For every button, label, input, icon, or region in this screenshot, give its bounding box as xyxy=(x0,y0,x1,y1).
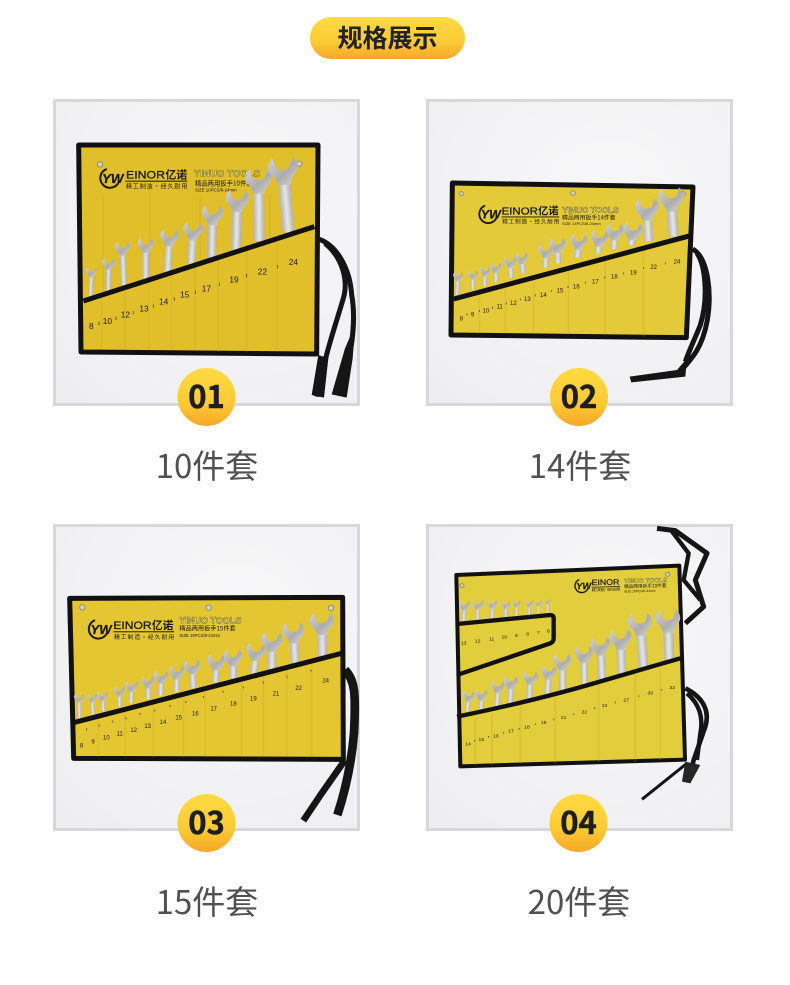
size numbers: top pocket xyxy=(461,628,550,646)
size numbers: top pocket: 13 xyxy=(461,640,467,646)
logo: EINOR brand block xyxy=(479,202,619,226)
size numbers: bottom pocket: 30 xyxy=(648,691,653,697)
size numbers: bottom pocket: 18 xyxy=(524,725,530,731)
logo: EINOR brand block: 亿诺 xyxy=(165,166,187,182)
bag: yellow roll xyxy=(456,566,685,766)
logo: EINOR brand block: 精品两用扳手14件套 xyxy=(562,213,616,222)
straps: panel 1 xyxy=(312,239,355,398)
size numbers: bottom pocket: 21 xyxy=(561,715,567,721)
logo: EINOR brand block: 精品两用扳手10件套 xyxy=(195,178,253,187)
size numbers: 24 xyxy=(674,260,681,266)
straps: panel 2 xyxy=(630,249,709,382)
straps: panel 4 xyxy=(642,528,707,799)
logo: EINOR brand block: YW xyxy=(90,622,113,637)
wrenches: 10 pieces xyxy=(85,156,303,297)
logo: EINOR brand block: SIZE 14PCS/8-24mm xyxy=(562,221,601,226)
wrenches: bottom pocket, 12 pieces xyxy=(461,610,682,712)
logo: EINOR brand block: SIZE 15PCS/8-24mm xyxy=(179,633,221,638)
logo: EINOR brand block: 精工制造·经久耐用 xyxy=(502,218,559,226)
size numbers: 15 xyxy=(180,290,190,300)
wrenches: 15 pieces xyxy=(74,613,335,719)
size numbers: 8 xyxy=(460,316,464,322)
size numbers: top pocket: 9 xyxy=(515,633,518,639)
logo: EINOR brand block: YINUO TOOLS xyxy=(624,578,667,585)
size numbers: 13 xyxy=(139,304,149,314)
straps: panel 3 xyxy=(303,670,355,821)
size numbers: bottom pocket: 16 xyxy=(493,733,499,739)
size numbers xyxy=(89,257,298,331)
size numbers: bottom pocket: 17 xyxy=(508,729,514,735)
panel: 14-piece set xyxy=(428,100,732,404)
size numbers: 14 xyxy=(160,720,167,726)
size numbers: 24 xyxy=(289,257,298,267)
logo: EINOR brand block: YINUO TOOLS xyxy=(194,169,260,179)
logo: EINOR brand block: EINOR xyxy=(502,205,538,217)
caption: 10件套: 10件套 xyxy=(156,440,258,488)
logo: EINOR brand block: 亿诺 xyxy=(538,202,559,217)
size numbers: bottom pocket: 27 xyxy=(624,698,629,704)
badge 04 xyxy=(550,794,608,852)
badge 03 xyxy=(178,794,236,852)
badge 01 xyxy=(178,368,236,426)
logo: EINOR brand block xyxy=(100,166,260,192)
badge 03: 03 xyxy=(188,798,225,843)
size numbers: 9 xyxy=(91,739,95,745)
logo: EINOR brand block: 精品两用扳手15件套 xyxy=(179,624,236,633)
size numbers: top pocket: 12 xyxy=(475,638,481,644)
size numbers: 19 xyxy=(250,697,257,703)
size numbers: 9 xyxy=(471,312,475,318)
size numbers: 10 xyxy=(103,316,112,326)
pocket band xyxy=(73,653,342,723)
size numbers: 24 xyxy=(322,679,330,685)
badge 02: 02 xyxy=(561,372,597,417)
heading pill: 规格展示: 规格展示 xyxy=(337,19,438,55)
size numbers: 11 xyxy=(117,732,123,738)
size numbers: 19 xyxy=(229,275,239,285)
size numbers: top pocket: 7 xyxy=(537,630,540,636)
bag: yellow roll xyxy=(70,597,343,759)
size numbers: 12 xyxy=(121,310,130,320)
caption: 15件套: 15件套 xyxy=(156,876,258,924)
size numbers: 8 xyxy=(89,321,94,331)
size numbers: 16 xyxy=(573,284,580,290)
logo: EINOR brand block: 精品两用扳手20件套 xyxy=(624,582,667,590)
size numbers: 14 xyxy=(159,296,169,306)
size numbers: bottom pocket: 22 xyxy=(582,709,587,715)
size numbers: 19 xyxy=(630,270,637,276)
logo: EINOR brand block: YINUO TOOLS xyxy=(562,205,619,215)
heading pill: 规格展示 xyxy=(310,17,465,59)
size numbers xyxy=(460,260,681,322)
size numbers xyxy=(80,679,330,749)
logo: EINOR brand block: SIZE 20PCS/6-32mm xyxy=(624,589,656,594)
size numbers: 13 xyxy=(524,297,531,303)
size numbers: 8 xyxy=(80,743,84,749)
size numbers: 11 xyxy=(497,305,503,311)
bottom pocket band xyxy=(457,658,680,717)
size numbers: 16 xyxy=(192,711,199,717)
caption: 20件套: 20件套 xyxy=(528,876,630,924)
panel: 15-piece set xyxy=(54,526,358,830)
caption: 14件套: 14件套 xyxy=(529,440,631,488)
badge 04: 04 xyxy=(560,798,597,843)
badge 02 xyxy=(550,368,608,426)
pocket band xyxy=(454,236,690,299)
size numbers: 12 xyxy=(510,301,517,307)
size numbers: bottom pocket: 14 xyxy=(465,742,471,748)
logo: EINOR brand block: YW xyxy=(576,581,593,591)
logo: EINOR brand block: SIZE 10PCS/8-24mm xyxy=(195,187,237,192)
logo: EINOR brand block: EINOR xyxy=(126,169,165,181)
size numbers: 18 xyxy=(230,701,237,707)
logo: EINOR brand block: YINUO TOOLS xyxy=(179,615,241,625)
logo: EINOR brand block: 亿诺 xyxy=(152,618,174,633)
size numbers: 17 xyxy=(210,706,218,712)
size numbers: top pocket: 6 xyxy=(547,628,550,634)
logo: EINOR brand block: 精工制造·经久耐用 xyxy=(592,587,621,593)
panel: 10-piece set xyxy=(54,100,358,404)
panel: 20-piece set xyxy=(428,526,732,830)
size numbers: bottom pocket: 32 xyxy=(670,685,675,691)
size numbers: 22 xyxy=(295,686,303,692)
pocket band xyxy=(83,227,314,301)
logo: EINOR brand block: 精工制造·经久耐用 xyxy=(126,181,187,190)
size numbers: 15 xyxy=(175,716,183,722)
logo: EINOR brand block: YW xyxy=(102,171,125,186)
size numbers: 21 xyxy=(273,691,280,697)
size numbers: top pocket: 8 xyxy=(526,631,529,637)
wrenches: 14 pieces xyxy=(452,187,687,295)
size numbers: top pocket: 10 xyxy=(502,635,507,641)
size numbers: 17 xyxy=(202,283,211,293)
logo: EINOR brand block: EINOR xyxy=(591,578,620,587)
size numbers: 10 xyxy=(103,736,110,742)
size numbers: bottom pocket xyxy=(465,685,675,748)
size numbers: 12 xyxy=(130,728,138,734)
size numbers: 17 xyxy=(592,280,599,286)
logo: EINOR brand block: 精工制造·经久耐用 xyxy=(114,632,174,641)
size numbers: top pocket: 11 xyxy=(489,636,494,642)
top pocket band xyxy=(457,615,554,675)
size numbers: 22 xyxy=(258,266,267,276)
bag: yellow roll xyxy=(79,145,318,354)
logo: EINOR brand block xyxy=(575,576,667,595)
size numbers: bottom pocket: 24 xyxy=(602,703,608,709)
size numbers: bottom pocket: 19 xyxy=(541,720,547,726)
size numbers: 13 xyxy=(144,724,152,730)
size numbers: bottom pocket: 15 xyxy=(479,737,484,743)
logo: EINOR brand block: EINOR xyxy=(113,620,152,632)
size numbers: 18 xyxy=(611,275,618,281)
logo: EINOR brand block xyxy=(89,615,241,641)
logo: EINOR brand block: YW xyxy=(481,208,502,222)
size numbers: 15 xyxy=(557,289,564,295)
size numbers: 14 xyxy=(540,293,547,299)
size numbers: 22 xyxy=(650,265,658,271)
bag: yellow roll xyxy=(451,183,693,338)
size numbers: 10 xyxy=(483,309,490,315)
badge 01: 01 xyxy=(188,372,225,417)
wrenches: top pocket, 8 pieces xyxy=(458,599,550,621)
